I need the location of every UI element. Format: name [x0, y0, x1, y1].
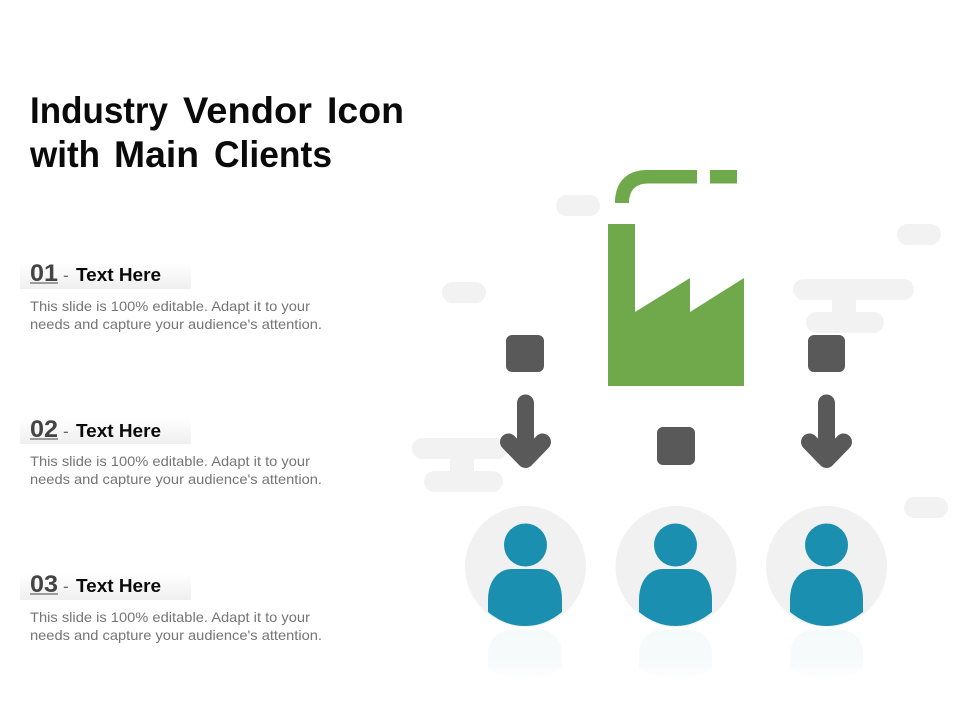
client 3 reflection — [790, 630, 863, 680]
client 3 head — [805, 524, 848, 566]
arrow: left — [508, 403, 542, 460]
background clouds — [412, 195, 948, 518]
client 1 — [465, 506, 586, 680]
item 03 band — [20, 574, 191, 600]
icon: factory — [608, 170, 744, 386]
client 1 reflection — [488, 630, 562, 680]
client 2 body — [639, 569, 712, 626]
icon: right square — [808, 335, 845, 372]
smoke pipe — [615, 170, 697, 203]
client 3 circle — [766, 506, 887, 627]
item 03 — [20, 571, 322, 643]
item 01 heading: Text Here — [76, 265, 161, 285]
client 1 head — [504, 524, 547, 566]
item 01 underline — [30, 282, 58, 284]
title: Icon — [327, 90, 404, 131]
item 02 body: needs and capture your audience's attention. — [30, 471, 322, 487]
item 03 body — [30, 609, 322, 643]
item 01 body — [30, 298, 322, 332]
item 03 body: This slide is 100% editable. Adapt it to your — [30, 609, 310, 625]
item 02 — [20, 416, 322, 487]
item 02 underline — [30, 438, 58, 440]
arrow: right — [810, 403, 844, 460]
icon: left square — [506, 335, 544, 372]
item 02 band — [20, 418, 191, 444]
item 01 — [20, 260, 322, 332]
icon: center square — [657, 427, 695, 465]
client 1 body — [488, 569, 562, 626]
item 03 dash: - — [63, 577, 69, 596]
item 03 heading: Text Here — [76, 576, 161, 596]
item 01 number: 01 — [30, 260, 58, 287]
item 03 body: needs and capture your audience's attention. — [30, 627, 322, 643]
client 1 circle — [465, 506, 586, 627]
item 03 underline — [30, 594, 58, 595]
item 02 heading: Text Here — [76, 421, 161, 441]
item 02 number: 02 — [30, 416, 58, 443]
title: Clients — [214, 134, 332, 175]
item 02 body: This slide is 100% editable. Adapt it to your — [30, 453, 310, 469]
title: Vendor — [183, 90, 312, 131]
title — [29, 90, 404, 175]
item 01 dash: - — [63, 266, 69, 285]
item 02 body — [30, 453, 322, 487]
title: with — [29, 134, 100, 175]
item 02 dash: - — [63, 422, 69, 441]
title: Main — [114, 134, 199, 175]
item 01 body: This slide is 100% editable. Adapt it to your — [30, 298, 310, 314]
client 2 head — [654, 524, 697, 566]
smoke dash — [710, 170, 737, 184]
factory building — [608, 224, 744, 386]
item 01 band — [20, 263, 191, 289]
client 2 — [616, 506, 736, 680]
client 3 — [766, 506, 887, 680]
item 01 body: needs and capture your audience's attention. — [30, 316, 322, 332]
client 3 body — [790, 569, 863, 626]
item 03 number: 03 — [30, 571, 58, 598]
title: Industry — [30, 90, 168, 131]
client 2 reflection — [639, 630, 712, 680]
client 2 circle — [616, 506, 736, 627]
